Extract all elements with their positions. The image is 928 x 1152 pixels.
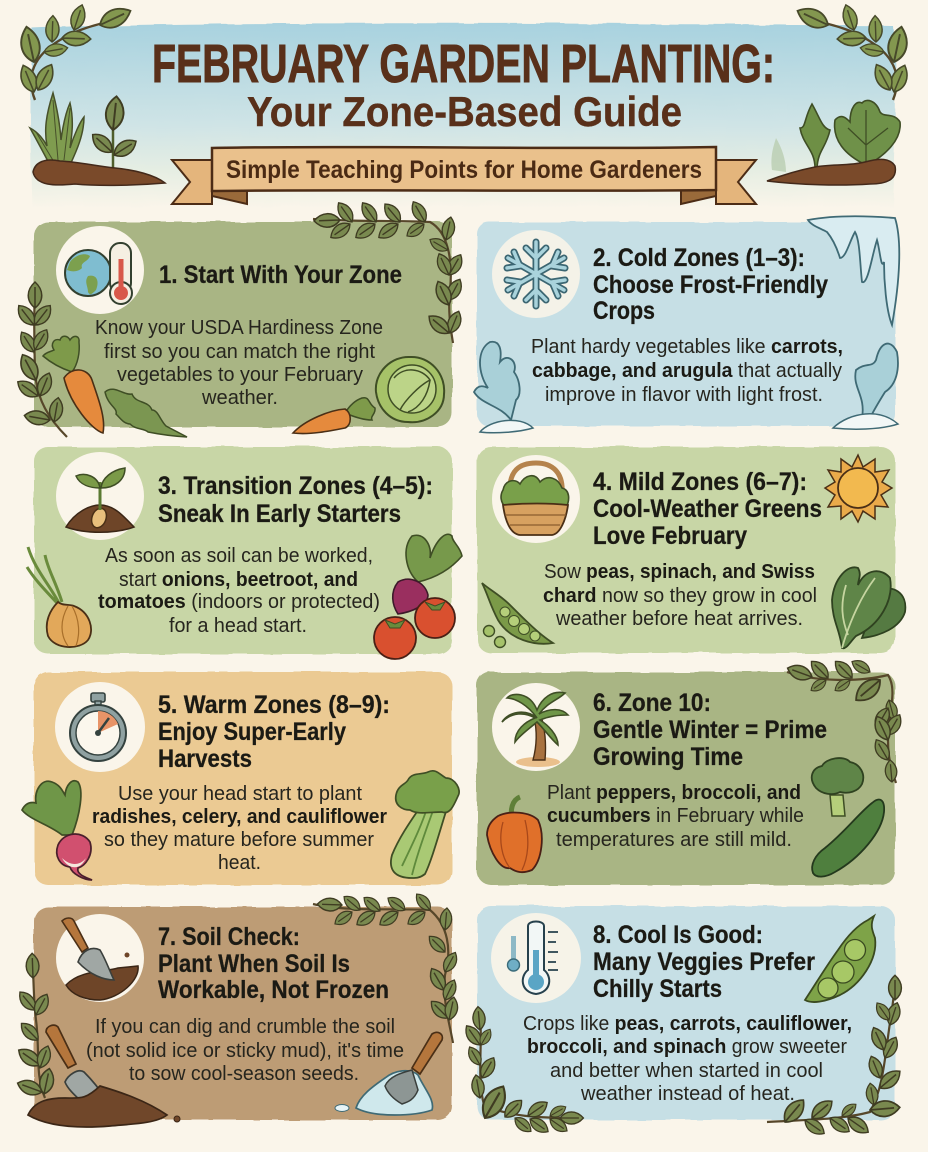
panel: 8 Cool Is Good — [462, 906, 904, 1138]
icon: tomatoes — [374, 598, 455, 659]
body text 5 — [92, 783, 387, 874]
body text 3: As soon as soil can be worked, — [105, 545, 373, 567]
body text 8: broccoli, and spinach grow sweeter — [527, 1036, 847, 1058]
icon circle: globe and thermometer — [56, 226, 144, 314]
body text 4: weather before heat arrives. — [555, 608, 803, 630]
banner text: Simple Teaching Points for Home Gardeners — [226, 156, 702, 184]
card background 8 — [477, 906, 895, 1120]
header panel — [17, 3, 911, 208]
icon circle: thermometers — [491, 913, 581, 1003]
icon: frosted plant left — [474, 342, 533, 433]
heading 7: Plant When Soil Is — [158, 950, 350, 978]
body text 5: Use your head start to plant — [118, 783, 362, 805]
icon: open pea pod — [482, 583, 553, 648]
body text 6: temperatures are still mild. — [556, 829, 792, 851]
heading 4: Cool-Weather Greens — [593, 495, 822, 523]
icon: broccoli — [812, 758, 863, 816]
vine: header right — [794, 3, 911, 100]
icon: cucumber — [812, 800, 884, 877]
body text 4: Sow peas, spinach, and Swiss — [544, 561, 815, 583]
panel: 6 Zone 10 — [477, 657, 905, 885]
vine: card 1 left — [14, 282, 67, 437]
heading 2: Choose Frost-Friendly — [593, 271, 828, 299]
icon circle: snowflake — [492, 230, 580, 318]
heading 8: 8. Cool Is Good: — [593, 921, 763, 949]
banner ribbon — [172, 147, 756, 204]
icon: sun — [825, 455, 892, 522]
vine: card 8 bottom right — [767, 975, 904, 1138]
vine: card 7 top right — [313, 891, 460, 1043]
heading 8: Chilly Starts — [593, 975, 722, 1003]
body text 8: Crops like peas, carrots, cauliflower, — [523, 1013, 852, 1035]
card background 4 — [477, 447, 895, 653]
vine: header left — [17, 3, 134, 100]
heading 2: Crops — [593, 297, 655, 325]
card background 7 — [34, 907, 452, 1120]
panel: 4 Mild Zones — [477, 447, 905, 653]
heading 8: Many Veggies Prefer — [593, 948, 815, 976]
body text 1: Know your USDA Hardiness Zone — [95, 317, 383, 339]
card background 1 — [34, 222, 452, 427]
icon: onion — [27, 547, 91, 647]
body text 1: first so you can match the right — [104, 341, 375, 363]
icon: soil mound with trowel — [28, 1025, 180, 1127]
heading 5: 5. Warm Zones (8–9): — [158, 691, 390, 719]
icon: spinach — [832, 567, 905, 648]
icon circle: trowel in soil — [56, 914, 144, 1002]
heading 2: 2. Cold Zones (1–3): — [593, 244, 805, 272]
vine: card 6 top right — [785, 657, 905, 783]
icon: smiling pea pod — [805, 916, 875, 1002]
body text 3: start onions, beetroot, and — [119, 569, 358, 591]
heading 5: Enjoy Super-Early — [158, 718, 346, 746]
body text 8: and better when started in cool — [550, 1060, 823, 1082]
heading 3: 3. Transition Zones (4–5): — [158, 472, 433, 500]
icon circle: basket of greens — [492, 455, 580, 543]
body text 5: so they mature before summer — [104, 829, 374, 851]
body text 5: heat. — [218, 852, 261, 874]
subtitle: Your Zone-Based Guide — [247, 88, 682, 135]
icon: celery — [391, 771, 459, 878]
card background 6 — [477, 672, 895, 885]
body text 4: chard now so they grow in cool — [543, 585, 817, 607]
card background 5 — [34, 672, 452, 885]
panel: 2 Cold Zones — [474, 216, 899, 433]
body text 2 — [531, 336, 843, 406]
panel: 1 Start With Your Zone — [14, 199, 466, 437]
body text 7: to sow cool-season seeds. — [129, 1063, 359, 1085]
heading 3: Sneak In Early Starters — [158, 500, 401, 528]
body text 3 — [98, 545, 380, 637]
icon circle: seedling — [56, 452, 144, 540]
body text 1: weather. — [201, 387, 278, 409]
panel: 5 Warm Zones — [22, 672, 459, 885]
heading 7 — [158, 923, 389, 1004]
heading 6 — [593, 689, 827, 771]
body text 2: Plant hardy vegetables like carrots, — [531, 336, 843, 358]
heading 8 — [593, 921, 815, 1003]
icon: frosted plant right — [833, 344, 898, 429]
icon: icicles — [808, 216, 899, 325]
icon: bell pepper — [487, 797, 542, 872]
plants: header left — [30, 93, 165, 185]
header sky background — [30, 23, 895, 208]
heading 5 — [158, 691, 390, 773]
body text 8 — [523, 1013, 852, 1105]
vine: card 1 top right — [313, 199, 466, 343]
body text 7: (not solid ice or sticky mud), it's time — [86, 1040, 404, 1062]
body text 3: for a head start. — [169, 615, 307, 637]
body text 2: improve in flavor with light frost. — [545, 384, 823, 406]
icon: arugula leaf — [105, 389, 187, 437]
heading 4 — [593, 468, 822, 550]
body text 8: weather instead of heat. — [580, 1083, 795, 1105]
body text 7: If you can dig and crumble the soil — [95, 1016, 395, 1038]
vine: card 7 left — [15, 953, 56, 1098]
heading 2 — [593, 244, 828, 325]
body text 5: radishes, celery, and cauliflower — [92, 806, 387, 828]
heading 7: 7. Soil Check: — [158, 923, 300, 951]
body text 3: tomatoes (indoors or protected) — [98, 591, 380, 613]
body text 6 — [547, 782, 804, 851]
icon: cabbage — [376, 357, 444, 422]
card background 2 — [477, 222, 895, 426]
body text 1: vegetables to your February — [117, 364, 363, 386]
heading 6: Growing Time — [593, 743, 743, 771]
icon circle: palm tree — [492, 683, 580, 771]
heading 5: Harvests — [158, 745, 252, 773]
body text 4 — [543, 561, 817, 630]
card background 3 — [34, 447, 452, 654]
vine: card 8 bottom left — [462, 1006, 583, 1136]
heading 4: 4. Mild Zones (6–7): — [593, 468, 807, 496]
body text 2: cabbage, and arugula that actually — [532, 360, 842, 382]
panel: 7 Soil Check — [15, 891, 460, 1127]
plants: header right — [767, 100, 900, 185]
heading 6: Gentle Winter = Prime — [593, 716, 827, 744]
heading 4: Love February — [593, 522, 747, 550]
panel: 3 Transition Zones — [27, 447, 462, 659]
body text 7 — [86, 1016, 404, 1085]
heading 6: 6. Zone 10: — [593, 689, 711, 717]
heading 3 — [158, 472, 433, 528]
body text 6: Plant peppers, broccoli, and — [547, 782, 801, 804]
icon: frozen soil with trowel — [335, 1032, 442, 1115]
heading 7: Workable, Not Frozen — [158, 976, 389, 1004]
icon: radish — [22, 781, 92, 880]
icon: large carrot — [43, 336, 104, 433]
body text 6: cucumbers in February while — [547, 805, 804, 827]
icon: beet — [393, 534, 462, 614]
icon: small carrot — [293, 398, 375, 434]
heading 1: 1. Start With Your Zone — [159, 261, 402, 289]
icon circle: stopwatch — [55, 682, 145, 772]
body text 1 — [95, 317, 383, 409]
